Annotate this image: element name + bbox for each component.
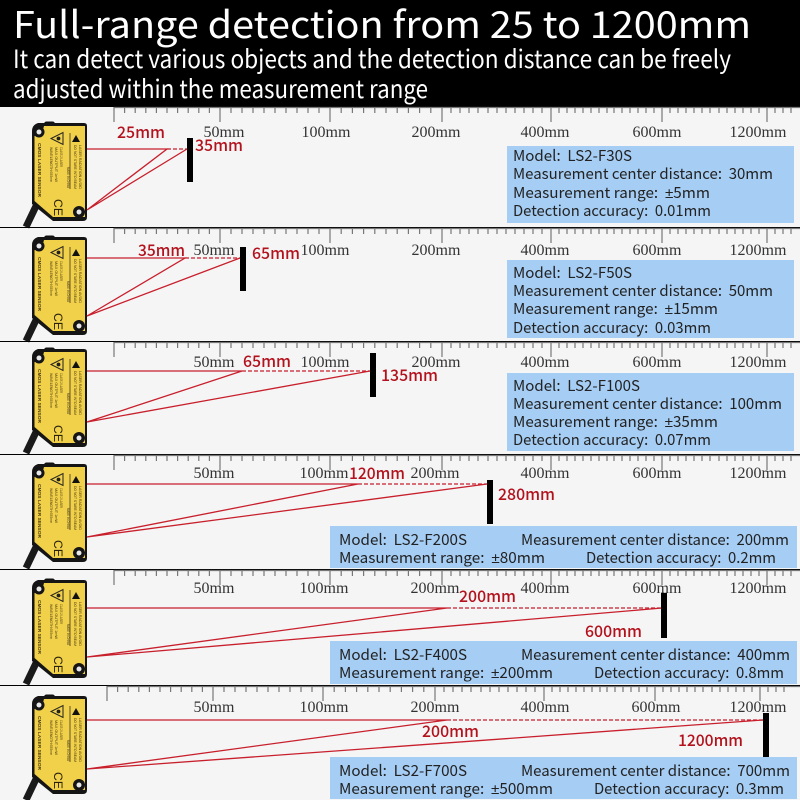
ruler: 400mm <box>521 242 570 259</box>
ruler: 200mm <box>411 580 460 597</box>
spec box: Model: LS2-F50S <box>513 262 632 283</box>
spec box: Measurement range: ±80mm <box>339 547 545 568</box>
far label: 65mm <box>252 240 300 264</box>
sensor <box>26 122 87 227</box>
spec box: Measurement center distance: 700mm <box>521 760 790 781</box>
target bar <box>487 480 493 524</box>
target bar <box>661 593 667 638</box>
laser beams <box>87 720 763 769</box>
spec box: Model: LS2-F400S <box>339 644 467 665</box>
sensor <box>26 694 87 800</box>
ruler: 50mm <box>194 580 235 597</box>
spec box: Model: LS2-F30S <box>513 145 632 166</box>
spec box: Measurement center distance: 100mm <box>513 393 782 414</box>
ruler: 50mm <box>204 124 245 141</box>
ruler: 100mm <box>300 699 349 716</box>
target bar <box>240 247 246 291</box>
panel: LS2-F400S <box>26 570 800 684</box>
spec box: Detection accuracy: 0.07mm <box>513 429 711 450</box>
ruler: 400mm <box>521 465 570 482</box>
ruler: 1200mm <box>730 465 787 482</box>
laser beams <box>87 371 370 422</box>
panel: LS2-F200S <box>26 455 800 568</box>
ruler: 600mm <box>633 580 682 597</box>
ruler: 100mm <box>301 354 350 371</box>
panel: LS2-F30S <box>26 107 800 227</box>
ruler: 200mm <box>412 124 461 141</box>
panel: LS2-F50S <box>26 228 800 341</box>
spec box: Model: LS2-F200S <box>339 529 467 550</box>
ruler: 50mm <box>194 242 235 259</box>
ruler: 600mm <box>632 699 681 716</box>
spec box: Model: LS2-F700S <box>339 760 467 781</box>
spec box <box>507 145 794 223</box>
ruler: 100mm <box>301 242 350 259</box>
spec box: Measurement range: ±35mm <box>513 411 718 432</box>
ruler <box>107 686 800 716</box>
ruler: 50mm <box>194 465 235 482</box>
laser beams <box>87 484 487 537</box>
ruler: 1200mm <box>730 580 787 597</box>
spec box: Detection accuracy: 0.8mm <box>594 662 784 683</box>
ruler: 200mm <box>411 465 460 482</box>
ruler: 200mm <box>411 699 460 716</box>
spec box: Measurement range: ±500mm <box>339 778 553 799</box>
near label: 25mm <box>117 119 165 143</box>
ruler <box>114 455 800 482</box>
subtitle: adjusted within the measurement range <box>13 70 428 106</box>
far label: 35mm <box>195 132 243 156</box>
sensor <box>26 578 87 684</box>
subtitle <box>13 40 731 106</box>
ruler: 100mm <box>300 465 349 482</box>
ruler: 600mm <box>633 354 682 371</box>
panel: LS2-F100S <box>26 342 800 453</box>
near label: 120mm <box>349 460 405 484</box>
ruler: 400mm <box>521 699 570 716</box>
spec box <box>330 641 797 684</box>
subtitle: It can detect various objects and the detection distance can be freely <box>13 40 731 76</box>
far label: 1200mm <box>678 727 743 751</box>
laser beams <box>87 608 662 657</box>
spec box: Measurement center distance: 30mm <box>513 163 773 184</box>
spec box: Measurement range: ±5mm <box>513 182 710 203</box>
far label: 280mm <box>498 481 555 505</box>
near label: 65mm <box>243 348 291 372</box>
spec box: Detection accuracy: 0.2mm <box>586 547 776 568</box>
ruler: 50mm <box>194 699 235 716</box>
laser beams <box>87 149 187 210</box>
spec box <box>507 260 794 338</box>
far label: 135mm <box>381 362 438 386</box>
near label: 35mm <box>138 237 185 261</box>
spec box: Measurement center distance: 400mm <box>521 644 790 665</box>
spec box: Detection accuracy: 0.01mm <box>513 200 711 221</box>
target bar <box>763 713 769 757</box>
ruler: 200mm <box>412 242 461 259</box>
near label: 200mm <box>459 583 516 607</box>
ruler: 400mm <box>521 580 570 597</box>
spec box: Model: LS2-F100S <box>513 375 640 396</box>
sensor <box>26 462 87 568</box>
spec box: Measurement center distance: 200mm <box>521 529 789 550</box>
panel: LS2-F700S <box>26 686 800 800</box>
ruler: 600mm <box>633 124 682 141</box>
ruler: 1200mm <box>730 354 787 371</box>
ruler: 1200mm <box>730 124 787 141</box>
header band <box>0 0 800 107</box>
spec box <box>507 373 794 451</box>
ruler: 1200mm <box>730 242 787 259</box>
target bar <box>187 138 193 182</box>
sensor <box>26 348 87 453</box>
ruler: 50mm <box>194 354 235 371</box>
ruler: 600mm <box>633 242 682 259</box>
ruler: 100mm <box>302 124 351 141</box>
spec box <box>330 757 797 799</box>
ruler <box>114 570 800 597</box>
spec box: Measurement range: ±15mm <box>513 298 718 319</box>
ruler <box>114 107 800 141</box>
ruler <box>114 342 800 371</box>
spec box: Detection accuracy: 0.03mm <box>513 317 711 338</box>
spec box <box>330 526 797 568</box>
target bar <box>370 353 376 397</box>
ruler: 200mm <box>412 354 461 371</box>
sensor <box>26 236 87 341</box>
spec box: Measurement center distance: 50mm <box>513 280 773 301</box>
ruler: 600mm <box>633 465 682 482</box>
near label: 200mm <box>422 718 479 742</box>
far label: 600mm <box>585 618 642 642</box>
ruler: 100mm <box>300 580 349 597</box>
spec box: Measurement range: ±200mm <box>339 662 553 683</box>
ruler: 1200mm <box>730 699 787 716</box>
ruler <box>114 228 800 259</box>
ruler: 400mm <box>521 354 570 371</box>
spec box: Detection accuracy: 0.3mm <box>594 778 784 799</box>
laser beams <box>87 258 240 316</box>
ruler: 400mm <box>521 124 570 141</box>
